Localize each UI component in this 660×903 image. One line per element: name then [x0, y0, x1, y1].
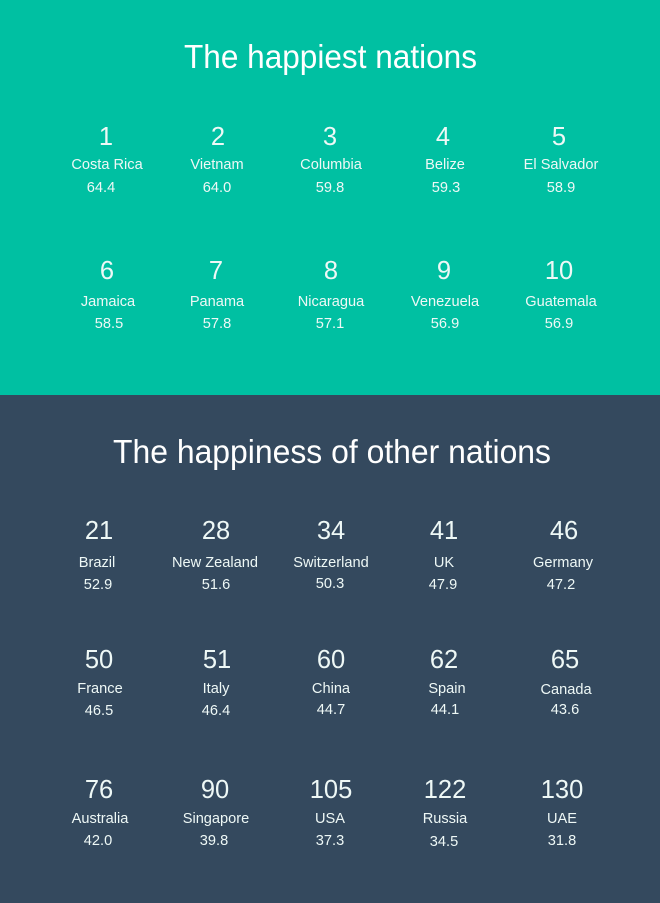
entry: New Zealand: 51.6 — [202, 577, 230, 593]
entry: Vietnam — [190, 123, 244, 196]
entry: Nicaragua: Nicaragua — [298, 294, 365, 310]
entry: Spain: 62 — [430, 646, 458, 674]
title: the happiest nations: The happiest nations — [184, 38, 477, 75]
entry: Columbia: Columbia — [300, 157, 363, 173]
entry: Switzerland: Switzerland — [293, 555, 369, 571]
entry: Jamaica: Jamaica — [81, 294, 136, 310]
entry: Germany: 47.2 — [547, 577, 575, 593]
entry: Venezuela: 56.9 — [431, 316, 459, 332]
entry: USA: USA — [315, 811, 345, 827]
entry: Switzerland: 50.3 — [316, 576, 344, 592]
entry: New Zealand: New Zealand — [172, 555, 258, 571]
entry: Venezuela: Venezuela — [411, 294, 480, 310]
entry: China: 44.7 — [317, 702, 345, 718]
entry: Columbia: 3 — [323, 123, 337, 151]
entry: USA — [310, 776, 352, 849]
entry: Jamaica — [81, 257, 136, 332]
entry: Canada: Canada — [540, 682, 592, 698]
entry: UAE: 31.8 — [548, 833, 576, 849]
entry: UK — [429, 517, 458, 593]
entry: Canada: 65 — [551, 646, 579, 674]
entry: Guatemala — [525, 257, 598, 332]
entry: Australia — [72, 776, 129, 849]
entry: Spain: 44.1 — [431, 702, 459, 718]
entry: UK: 47.9 — [429, 577, 457, 593]
entry: UAE: UAE — [547, 811, 577, 827]
entry: Columbia: 59.8 — [316, 180, 344, 196]
entry: Belize: 59.3 — [432, 180, 460, 196]
entry: Venezuela — [411, 257, 480, 332]
entry: New Zealand: 28 — [202, 517, 230, 545]
entry: Nicaragua: 8 — [324, 257, 338, 285]
entry: Germany — [533, 517, 594, 593]
entry: Canada: 43.6 — [551, 702, 579, 718]
entry: Costa Rica: 1 — [99, 123, 113, 151]
entry: Italy: 51 — [203, 646, 231, 674]
entry: USA: 105 — [310, 776, 352, 804]
entry: Russia: Russia — [423, 811, 468, 827]
entry: Russia — [423, 776, 468, 850]
entry: Belize: 4 — [436, 123, 450, 151]
entry: Switzerland — [293, 517, 369, 592]
entry: UAE: 130 — [541, 776, 583, 804]
entry: France — [77, 646, 123, 719]
entry: UK: 41 — [430, 517, 458, 545]
entry: Spain: Spain — [428, 681, 466, 697]
entry: El Salvador: 58.9 — [547, 180, 575, 196]
entry: Panama: Panama — [190, 294, 245, 310]
entry: Australia: 76 — [85, 776, 113, 804]
entry: Jamaica: 58.5 — [95, 316, 123, 332]
entry: Vietnam: 2 — [211, 123, 225, 151]
entry: UK: UK — [434, 555, 454, 571]
entry: Nicaragua: 57.1 — [316, 316, 344, 332]
entry: El Salvador: El Salvador — [524, 157, 598, 173]
entry: Brazil: 52.9 — [84, 577, 112, 593]
panel: other nations — [0, 395, 660, 903]
entry: Costa Rica — [71, 123, 144, 196]
entry: Germany: 46 — [550, 517, 578, 545]
panel: happiest nations — [0, 0, 660, 395]
entry: Panama — [190, 257, 245, 332]
entry: Australia: 42.0 — [84, 833, 112, 849]
entry: Russia: 122 — [424, 776, 466, 804]
entry: Guatemala: Guatemala — [525, 294, 598, 310]
entry: Singapore: Singapore — [183, 811, 249, 827]
entry: Vietnam: Vietnam — [190, 157, 244, 173]
entry: USA: 37.3 — [316, 833, 344, 849]
entry: Brazil: 21 — [85, 517, 113, 545]
entry: El Salvador: 5 — [552, 123, 566, 151]
entry: Italy — [202, 646, 231, 719]
entry: France: 50 — [85, 646, 113, 674]
entry: Guatemala: 56.9 — [545, 316, 573, 332]
entry: Belize — [425, 123, 465, 196]
entry: New Zealand — [172, 517, 258, 593]
entry: Russia: 34.5 — [430, 834, 458, 850]
entry: Italy: 46.4 — [202, 703, 230, 719]
entry: Brazil — [79, 517, 115, 593]
entry: Costa Rica: 64.4 — [87, 180, 115, 196]
entry: Jamaica: 6 — [100, 257, 114, 285]
entry: Belize: Belize — [425, 157, 465, 173]
entry: Nicaragua — [298, 257, 365, 332]
entry: Brazil: Brazil — [79, 555, 115, 571]
entry: Venezuela: 9 — [437, 257, 451, 285]
entry: Singapore: 90 — [201, 776, 229, 804]
entry: France: France — [77, 681, 123, 697]
entry: Switzerland: 34 — [317, 517, 345, 545]
entry: Australia: Australia — [72, 811, 129, 827]
entry: Columbia — [300, 123, 363, 196]
entry: China: 60 — [317, 646, 345, 674]
entry: UAE — [541, 776, 583, 849]
entry: Vietnam: 64.0 — [203, 180, 231, 196]
title: the happiness of other nations: The happiness of other nations — [113, 433, 551, 470]
entry: Guatemala: 10 — [545, 257, 573, 285]
entry: Singapore — [183, 776, 249, 849]
entry: Italy: Italy — [203, 681, 230, 697]
entry: Costa Rica: Costa Rica — [71, 157, 144, 173]
entry: Panama: 57.8 — [203, 316, 231, 332]
entry: China: China — [312, 681, 351, 697]
entry: Germany: Germany — [533, 555, 594, 571]
entry: El Salvador — [524, 123, 598, 196]
entry: Canada — [540, 646, 592, 718]
entry: Spain — [428, 646, 466, 718]
entry: China — [312, 646, 351, 718]
entry: Panama: 7 — [209, 257, 223, 285]
entry: Singapore: 39.8 — [200, 833, 228, 849]
entry: France: 46.5 — [85, 703, 113, 719]
